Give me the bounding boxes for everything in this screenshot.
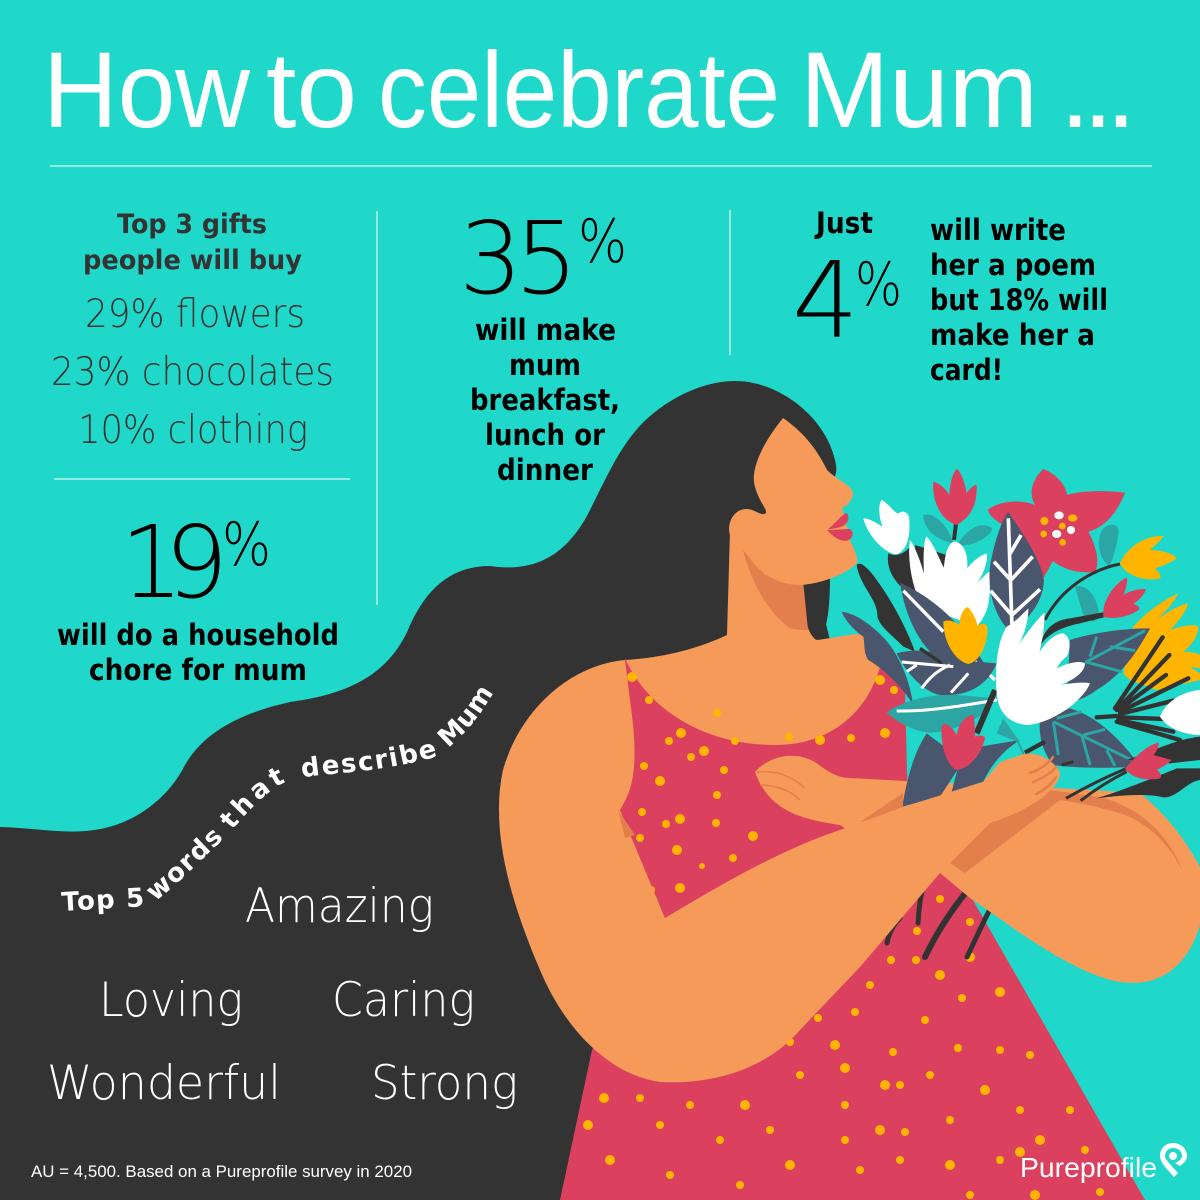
yellow fronds xyxy=(1123,593,1200,690)
stat: just 4% poem: will write xyxy=(930,213,1066,247)
stems and red tulip lower right xyxy=(1062,737,1200,801)
large white centre flower xyxy=(996,608,1090,725)
infographic: Top 5 words that describe Mum xyxy=(61,688,493,914)
footnote: AU = 4,500. Based on a Pureprofile survey in 2020 xyxy=(31,1162,412,1181)
big white flower xyxy=(909,537,990,627)
dress polka dots xyxy=(583,672,1104,1200)
slate right lower leaf xyxy=(1040,708,1140,768)
stat: 19% household chore: % xyxy=(222,510,271,580)
woman: neck and shoulders xyxy=(625,530,905,800)
stat: just 4% poem: her a poem xyxy=(930,248,1096,282)
text block: top 3 gifts xyxy=(51,209,334,453)
stat: 35% make a meal: will make xyxy=(475,313,616,347)
stat: 35% make a meal: breakfast, xyxy=(470,383,620,417)
red open flower xyxy=(988,469,1125,578)
yellow tulip right xyxy=(1045,536,1177,620)
dark fronds xyxy=(1097,637,1188,740)
arm shadow xyxy=(950,790,1183,873)
stat: just 4% poem: 4 xyxy=(792,240,859,362)
dress xyxy=(560,640,1145,1200)
text block: top 3 gifts: people will buy xyxy=(83,245,302,276)
dark stems centre xyxy=(977,690,1045,753)
text block: top 3 gifts: 23% chocolates xyxy=(51,350,334,395)
stat: 35% make a meal: 35 xyxy=(459,200,570,317)
teal small leaf xyxy=(997,718,1028,775)
stat: 35% make a meal: % xyxy=(578,207,627,277)
slate lower leaf xyxy=(897,648,997,695)
title: to xyxy=(266,29,357,150)
woman: back arm and chest hand xyxy=(755,756,1200,983)
title: Mum xyxy=(800,29,1038,150)
logo: Pureprofile xyxy=(1020,1143,1187,1183)
top red tulip xyxy=(933,469,977,540)
stat: 35% make a meal xyxy=(459,200,627,487)
stat: just 4% poem xyxy=(792,206,1108,387)
dark left leaf xyxy=(857,564,915,652)
stat: just 4% poem: card! xyxy=(930,353,1003,387)
white tulip far right xyxy=(1160,690,1200,735)
stat: just 4% poem: Just xyxy=(814,206,873,240)
title: ... xyxy=(1060,29,1136,150)
slate centre leaf xyxy=(989,512,1044,633)
words describing Mum: Caring xyxy=(332,973,475,1028)
stat: just 4% poem: make her a xyxy=(930,318,1095,352)
neck shadow xyxy=(743,550,808,630)
slate left leaf xyxy=(842,612,913,705)
hair flowing into bottom left xyxy=(0,381,836,1200)
logo: Pureprofile: Pureprofile xyxy=(1020,1152,1157,1183)
words describing Mum: Amazing xyxy=(245,879,434,934)
hair behind neck xyxy=(803,575,830,640)
curved heading: top 5 words xyxy=(62,630,525,911)
stat: 35% make a meal: lunch or xyxy=(485,418,606,452)
words describing Mum xyxy=(47,879,518,1111)
stat: 19% household chore: chore for mum xyxy=(89,653,307,687)
title: celebrate xyxy=(378,29,780,150)
yellow tulip centre xyxy=(943,607,987,664)
bouquet of flowers and leaves xyxy=(842,469,1200,807)
teal background leaves xyxy=(923,515,1119,622)
forearm shade under chest xyxy=(860,793,903,822)
stems hanging below the arms xyxy=(887,880,992,957)
lips xyxy=(827,513,853,541)
stat: 35% make a meal: dinner xyxy=(497,453,594,487)
woman: front arm and hand xyxy=(499,660,1060,1082)
white tulip left xyxy=(863,500,917,597)
stat: just 4% poem: % xyxy=(855,250,902,320)
red small tulip and stem xyxy=(1040,577,1146,647)
text block: top 3 gifts: 29% flowers xyxy=(85,292,305,337)
words describing Mum: Strong xyxy=(371,1056,518,1111)
slate right upper leaf xyxy=(1067,628,1150,702)
stat: 19% household chore xyxy=(57,504,339,687)
slate veined leaf xyxy=(900,583,995,680)
text block: top 3 gifts: 10% clothing xyxy=(78,408,308,453)
words describing Mum: Loving xyxy=(99,973,243,1028)
stat: 19% household chore: 19 xyxy=(120,504,220,621)
slate bottom leaf xyxy=(902,733,1020,807)
title: How xyxy=(43,29,251,150)
red tulip low xyxy=(941,715,985,770)
text block: top 3 gifts: Top 3 gifts xyxy=(117,209,267,240)
words describing Mum: Wonderful xyxy=(47,1056,281,1111)
stat: 19% household chore: will do a household xyxy=(57,618,339,652)
stat: just 4% poem: but 18% will xyxy=(930,283,1108,317)
stat: 35% make a meal: mum xyxy=(509,348,581,382)
teal horizontal leaf xyxy=(887,695,997,733)
woman: face xyxy=(729,418,857,585)
